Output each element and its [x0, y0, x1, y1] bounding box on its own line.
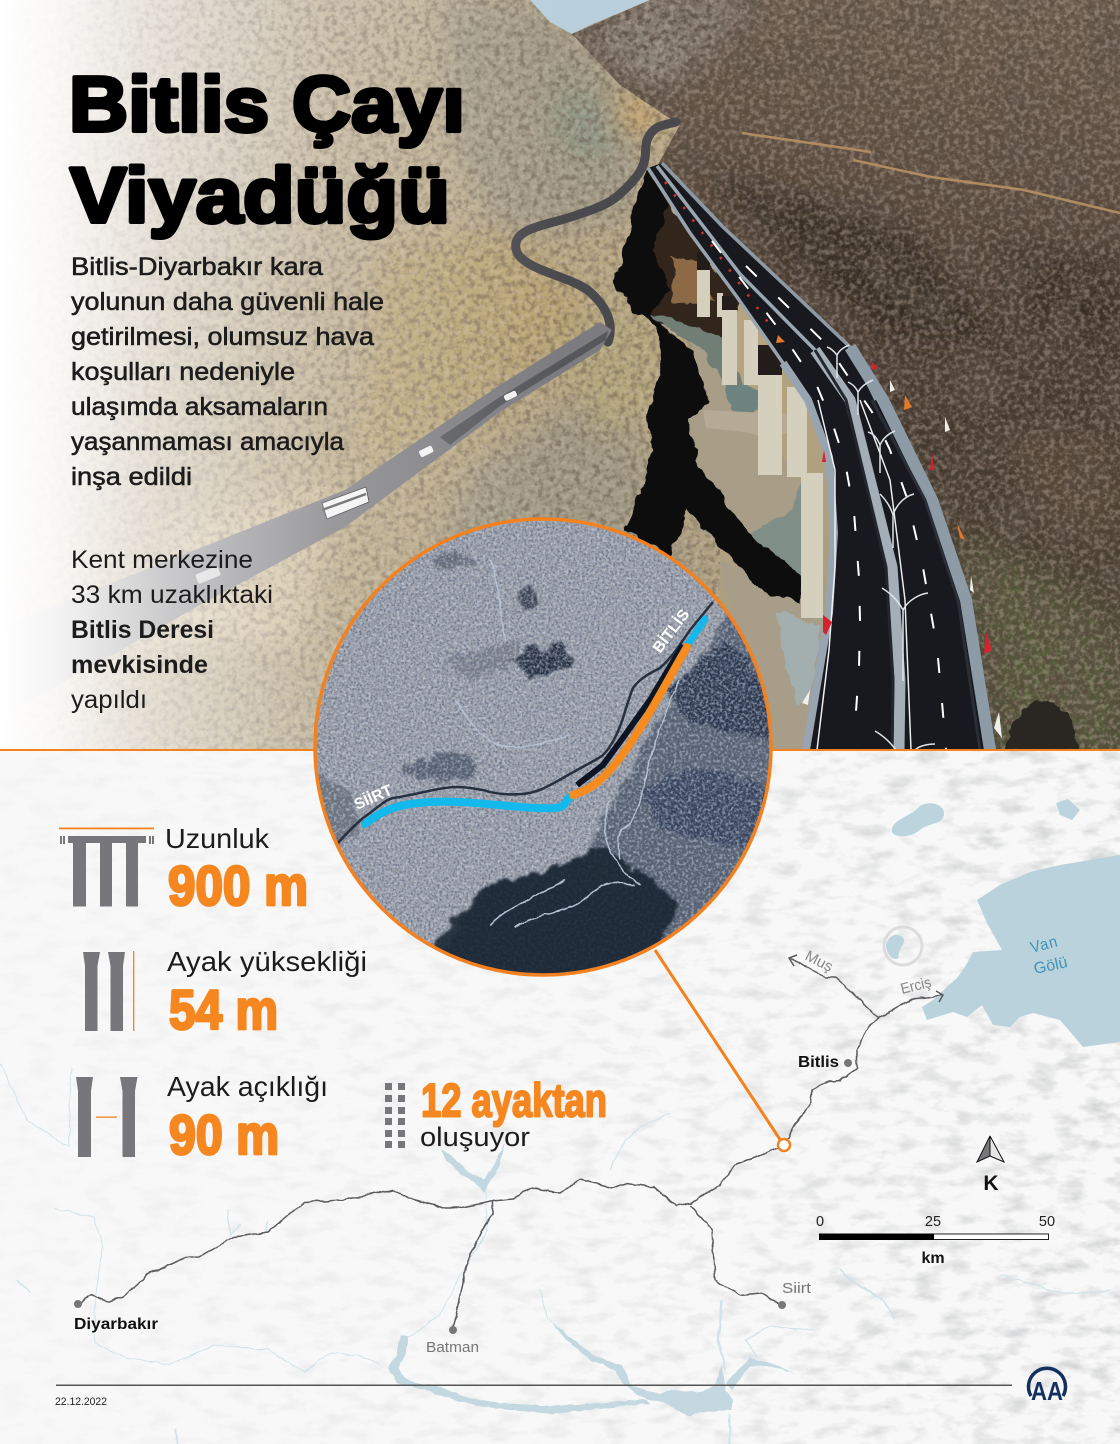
stat: pier span: Ayak açıklığı [167, 1071, 328, 1102]
orange divider line [0, 749, 1120, 751]
description text: Bitlis-Diyarbakır kara [71, 253, 323, 281]
stat: pier height [167, 946, 367, 1041]
white fade over left side [0, 0, 560, 750]
stat: pier count [420, 1074, 607, 1152]
footer rule [56, 1384, 1012, 1386]
stat: pier span: 90 m [169, 1103, 279, 1166]
stat: length: Uzunluk [165, 823, 270, 854]
logo: AA [1028, 1368, 1066, 1406]
description text: koşulları nedeniyle [71, 358, 295, 386]
lake label [1029, 933, 1069, 978]
inset: orange viaduct [573, 647, 687, 795]
scale bar: 25 [925, 1214, 941, 1230]
hillside: right dark slope [560, 0, 1120, 750]
lane dashes left [712, 241, 860, 740]
scale bar: 50 [1039, 1214, 1055, 1230]
flags along deck [665, 182, 770, 325]
small arch bridge [703, 410, 790, 436]
road label: Erciş: Erciş [899, 974, 933, 998]
vehicle: bus [322, 487, 369, 519]
scale bar: 0 [816, 1214, 824, 1230]
location text: mevkisinde [71, 651, 208, 679]
reservoirs: Batman and Ilısu [388, 1143, 795, 1416]
icon: pier count dots [385, 1083, 405, 1148]
callout location marker [778, 1139, 790, 1151]
nemrut crater [884, 927, 922, 965]
inset label: SİİRT: SİİRT [352, 782, 396, 814]
city: Diyarbakır: Diyarbakır [74, 1316, 158, 1333]
city: Batman [426, 1326, 479, 1356]
satellite inset map [310, 515, 780, 980]
description text: inşa edildi [71, 463, 192, 491]
city: Bitlis: Bitlis [798, 1054, 839, 1071]
icon: north arrow: K [983, 1172, 999, 1195]
road arrowheads [789, 955, 943, 1002]
deck: roadway [648, 163, 1002, 750]
date: 22.12.2022 [55, 1396, 107, 1408]
location text: Bitlis Deresi [71, 616, 214, 644]
inset label: BİTLİS: BİTLİS [650, 606, 693, 656]
description text: ulaşımda aksamaların [71, 393, 328, 421]
lane dashes right [746, 266, 946, 749]
lake: Van Gölü [922, 855, 1120, 1047]
lake label: Gölü [1032, 954, 1069, 978]
icon: north arrow [977, 1136, 1004, 1195]
title [69, 60, 465, 239]
description text: yolunun daha güvenli hale [71, 288, 384, 316]
barriers [648, 163, 990, 750]
city: Batman: Batman [426, 1339, 479, 1356]
stat: pier height: Ayak yüksekliği [167, 946, 367, 977]
inset ring [315, 519, 771, 975]
street lights [827, 345, 935, 750]
title: Bitlis Çayı [69, 60, 465, 148]
city: Siirt [778, 1280, 812, 1309]
stat: pier height: 54 m [169, 978, 278, 1041]
trails on dark slope [742, 133, 1120, 213]
inset terrain shading [310, 550, 780, 975]
scale bar [816, 1214, 1055, 1267]
scale bar: km [921, 1250, 945, 1267]
winding road [70, 118, 680, 675]
photo: viaduct and valley [0, 0, 1120, 750]
stat: length [165, 823, 308, 917]
inset: viaduct shadow [577, 645, 683, 785]
city: Siirt: Siirt [782, 1280, 812, 1297]
map rivers and reservoirs [0, 1063, 1110, 1444]
road label: Muş: Muş [802, 947, 836, 976]
small lakes [886, 799, 1080, 959]
stat: pier span [167, 1071, 328, 1166]
description text [71, 253, 384, 491]
dark pond lower right [1005, 700, 1080, 750]
description text: getirilmesi, olumsuz hava [71, 323, 374, 351]
stat: pier count: oluşuyor [420, 1122, 530, 1152]
hillside: left slope [40, 0, 830, 749]
location text [71, 546, 273, 714]
icon: bridge length [59, 828, 154, 906]
lake label: Van [1029, 933, 1060, 957]
gorge: ground, water and shadow [613, 168, 825, 750]
logo: AA: AA [1031, 1376, 1063, 1406]
location text: yapıldı [71, 686, 147, 714]
inset: valley road [338, 602, 713, 843]
callout leader line [655, 950, 781, 1141]
stat: pier count: 12 ayaktan [421, 1074, 607, 1126]
inset: blue route north [688, 619, 705, 644]
piers [697, 252, 823, 618]
inset: dark ravine [433, 845, 680, 980]
inset: stream lines [455, 560, 680, 928]
title: Viyadüğü [70, 151, 450, 239]
city: Diyarbakır [74, 1300, 158, 1333]
vehicles: cars [195, 390, 518, 584]
sky [530, 0, 650, 34]
location text: 33 km uzaklıktaki [71, 581, 273, 609]
stat: length: 900 m [168, 854, 308, 917]
location text: Kent merkezine [71, 546, 253, 574]
inset: blue route [365, 796, 572, 824]
map background [137, 751, 1120, 1444]
icon: pier span [76, 1077, 138, 1157]
description text: yaşanmaması amacıyla [71, 428, 344, 456]
road network [78, 958, 943, 1330]
icon: pier height [83, 951, 134, 1031]
